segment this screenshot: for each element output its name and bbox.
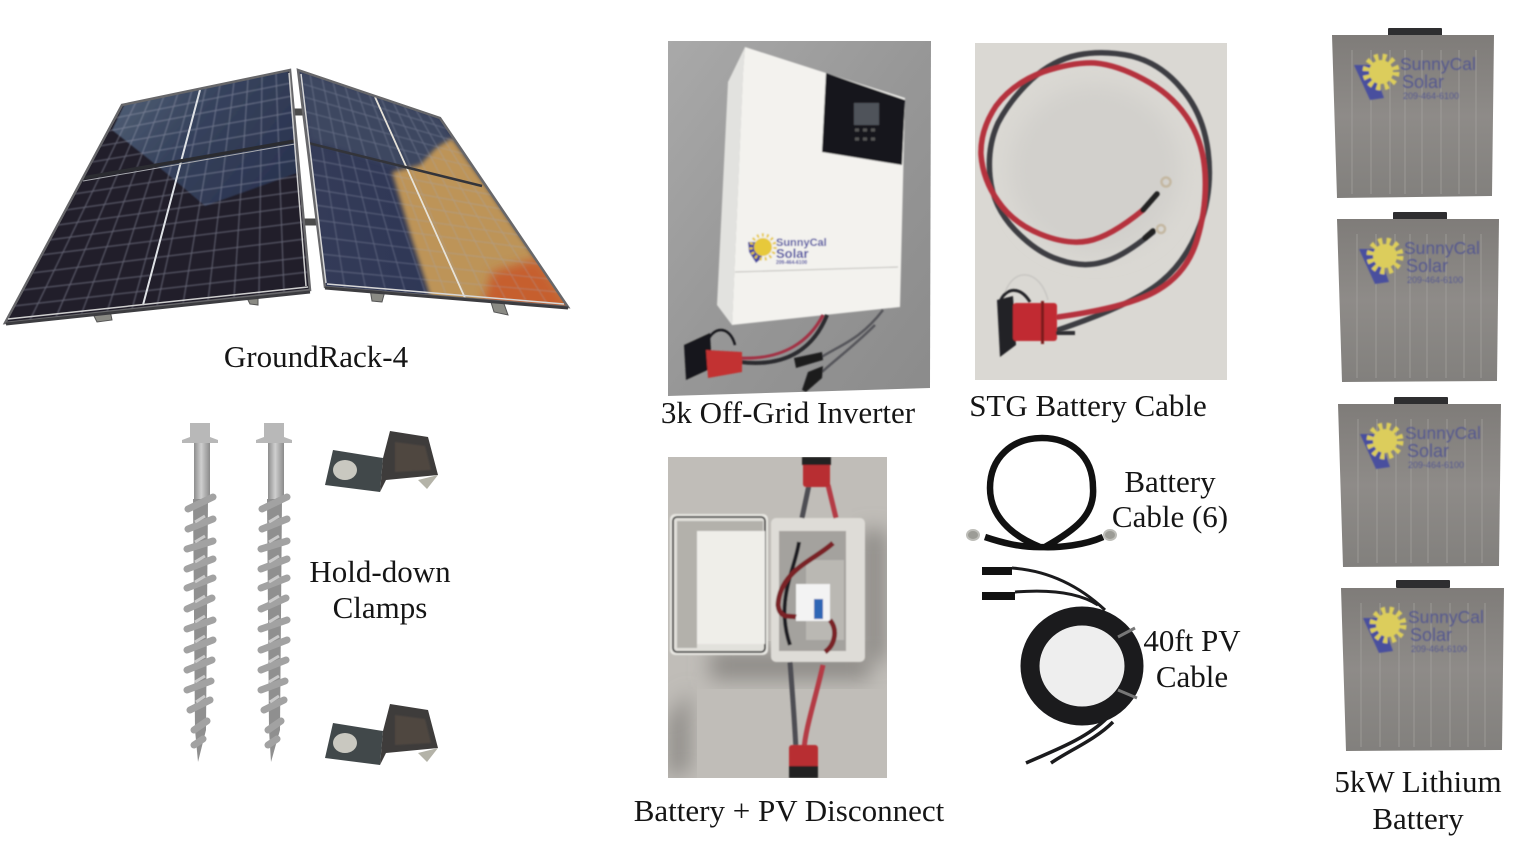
black cable coil: [989, 53, 1209, 330]
internal wiring: [784, 542, 799, 645]
battery 2: [1337, 212, 1499, 382]
red cable coil: [981, 63, 1205, 317]
photo: solar panels on ground rack: [0, 60, 580, 330]
photo: battery and PV disconnect box: [668, 457, 887, 778]
panel seams: [375, 97, 465, 298]
label: 3k Off-Grid Inverter: 3k Off-Grid Inverter: [661, 395, 916, 430]
label: 40ft PV Cable: [1143, 623, 1241, 694]
label: Hold-down Clamps: [309, 554, 451, 625]
icon: 40ft PV cable coil: [982, 568, 1137, 763]
bottom connector: [789, 745, 818, 772]
battery 2: SunnyCal: [1404, 238, 1480, 258]
battery 3: 209-464-6100: [1408, 460, 1464, 470]
battery 3: [1338, 397, 1501, 567]
battery 2: Solar: [1406, 256, 1448, 276]
label: STG Battery Cable: STG Battery Cable: [969, 388, 1207, 423]
label: Hold-down Clamps: Clamps: [333, 590, 427, 625]
battery connector: [997, 275, 1075, 357]
label: GroundRack-4: GroundRack-4: [224, 339, 409, 374]
open lid: [670, 514, 768, 655]
inverter body: 209-464-6100: [776, 260, 807, 266]
battery 3: SunnyCal: [1405, 423, 1481, 443]
heat shrink ends: [1143, 194, 1157, 210]
inverter body: Solar: [776, 246, 809, 261]
inverter body: [717, 47, 905, 325]
label: Battery Cable (6): Battery: [1124, 464, 1216, 499]
battery 1: [1332, 28, 1494, 198]
control panel: [822, 73, 905, 165]
label: 5kW Lithium Battery: Battery: [1372, 801, 1464, 836]
enclosure box: [771, 518, 865, 662]
battery 1: SunnyCal: [1400, 54, 1476, 74]
battery 1: 209-464-6100: [1403, 91, 1459, 101]
rack rail between arrays: [288, 112, 316, 222]
battery 4: Solar: [1410, 625, 1452, 645]
inverter body: SunnyCal: [776, 237, 827, 249]
battery 3: Solar: [1407, 441, 1449, 461]
battery 4: SunnyCal: [1408, 607, 1484, 627]
label: Battery + PV Disconnect: Battery + PV Disconnect: [634, 793, 945, 828]
battery 1: Solar: [1402, 72, 1444, 92]
label: 40ft PV Cable: 40ft PV: [1143, 623, 1241, 658]
mounting feet: [92, 289, 508, 322]
hold-down clamp bottom: [325, 704, 438, 765]
label: 40ft PV Cable: Cable: [1156, 659, 1228, 694]
ground screw 1: [182, 423, 218, 762]
hold-down clamp top: [325, 431, 438, 492]
battery 4: 209-464-6100: [1411, 644, 1467, 654]
breaker: [796, 584, 830, 621]
battery 2: 209-464-6100: [1407, 275, 1463, 285]
top connector: [802, 464, 831, 488]
battery 4: [1341, 580, 1504, 751]
photo: 3k off-grid inverter: [668, 41, 931, 396]
inverter logo: [748, 242, 762, 263]
ground screw 2: [256, 423, 292, 762]
inverter cables and connectors: [684, 310, 883, 392]
icon: black battery cable coil: [967, 438, 1116, 547]
label: Battery Cable (6): Cable (6): [1112, 499, 1228, 534]
photo: STG battery cable: [975, 43, 1227, 380]
panel seams: [143, 90, 200, 305]
label: 5kW Lithium Battery: [1334, 764, 1502, 836]
label: 5kW Lithium Battery: 5kW Lithium: [1334, 764, 1502, 799]
label: Hold-down Clamps: Hold-down: [309, 554, 451, 589]
ring terminals: [1162, 178, 1170, 186]
outer cables: [790, 485, 809, 750]
label: Battery Cable (6): [1112, 464, 1228, 534]
right solar array: [296, 68, 570, 310]
left solar array: [0, 60, 320, 330]
